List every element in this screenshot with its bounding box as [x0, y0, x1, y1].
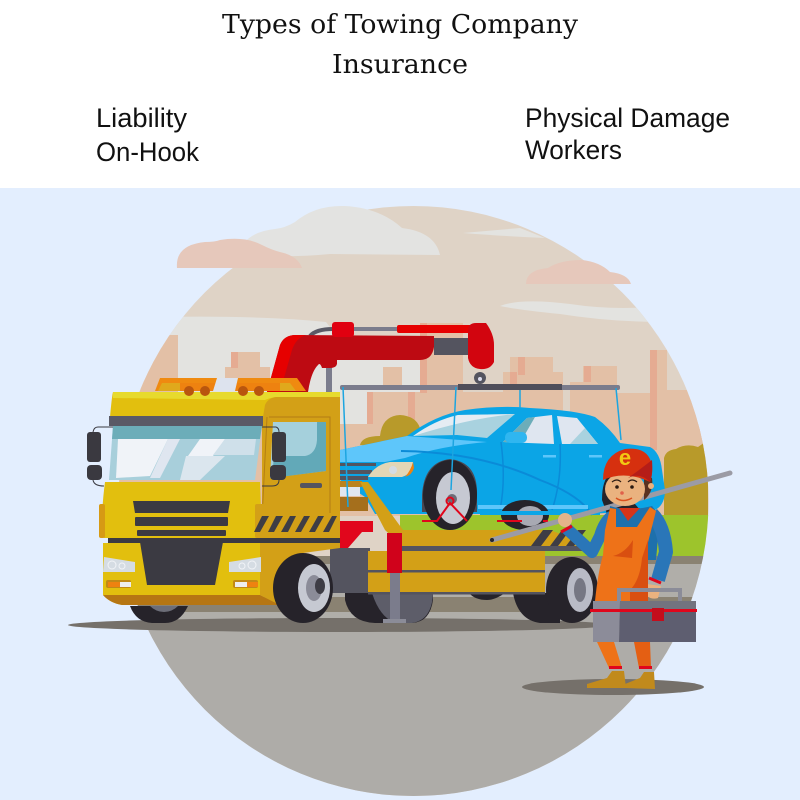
grass: [400, 515, 720, 556]
mechanic: [490, 445, 730, 689]
flatbed: [330, 482, 597, 623]
circular city scene: [100, 200, 730, 800]
right insurance list: [525, 103, 730, 165]
ground shadows: [68, 618, 704, 695]
title: [222, 10, 578, 80]
road: [138, 556, 704, 796]
rear and middle wheels: [345, 557, 598, 623]
mirrors: [87, 427, 286, 486]
title: Types of Towing Company: [222, 10, 578, 40]
clouds: [177, 206, 631, 284]
bushes: [360, 415, 708, 515]
pale blue background panel: [0, 188, 800, 800]
amber roof lights: [155, 378, 306, 396]
left insurance list: [96, 103, 199, 167]
toolbox: [590, 590, 697, 642]
crane: [267, 322, 494, 394]
front wheels: [130, 553, 333, 623]
title: Insurance: [332, 50, 468, 80]
car straps: [343, 387, 621, 521]
right insurance list: Physical Damage: [525, 103, 730, 133]
shirt and arms: [558, 506, 666, 599]
left insurance list: On-Hook: [96, 137, 199, 167]
head and cap: e: [619, 445, 631, 470]
pole: [490, 473, 730, 542]
spreader bar: [340, 384, 620, 390]
legs and boots: [587, 642, 655, 689]
overalls: [595, 507, 656, 601]
tow truck: [87, 322, 665, 623]
cab: [99, 392, 340, 605]
head and cap: [603, 445, 654, 506]
car: [340, 407, 665, 530]
right insurance list: Workers: [525, 135, 622, 165]
left insurance list: Liability: [96, 103, 188, 133]
